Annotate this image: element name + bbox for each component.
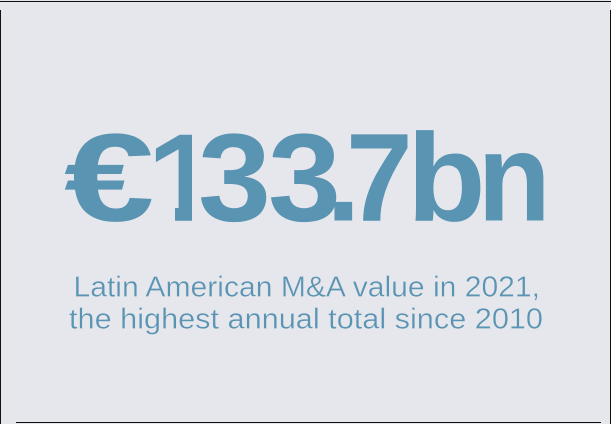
headline figure: 3 xyxy=(268,109,341,248)
caption xyxy=(69,272,543,336)
headline figure xyxy=(64,130,544,222)
caption: Latin American M&A value in 2021, xyxy=(74,272,540,304)
headline figure: . xyxy=(326,109,361,248)
headline figure: € xyxy=(64,108,154,247)
headline figure: n xyxy=(478,107,551,247)
headline figure: 1 xyxy=(146,107,223,247)
caption: the highest annual total since 2010 xyxy=(69,304,543,336)
headline figure: 3 xyxy=(198,109,271,248)
headline figure: b xyxy=(407,107,486,247)
headline figure: 7 xyxy=(346,107,413,247)
